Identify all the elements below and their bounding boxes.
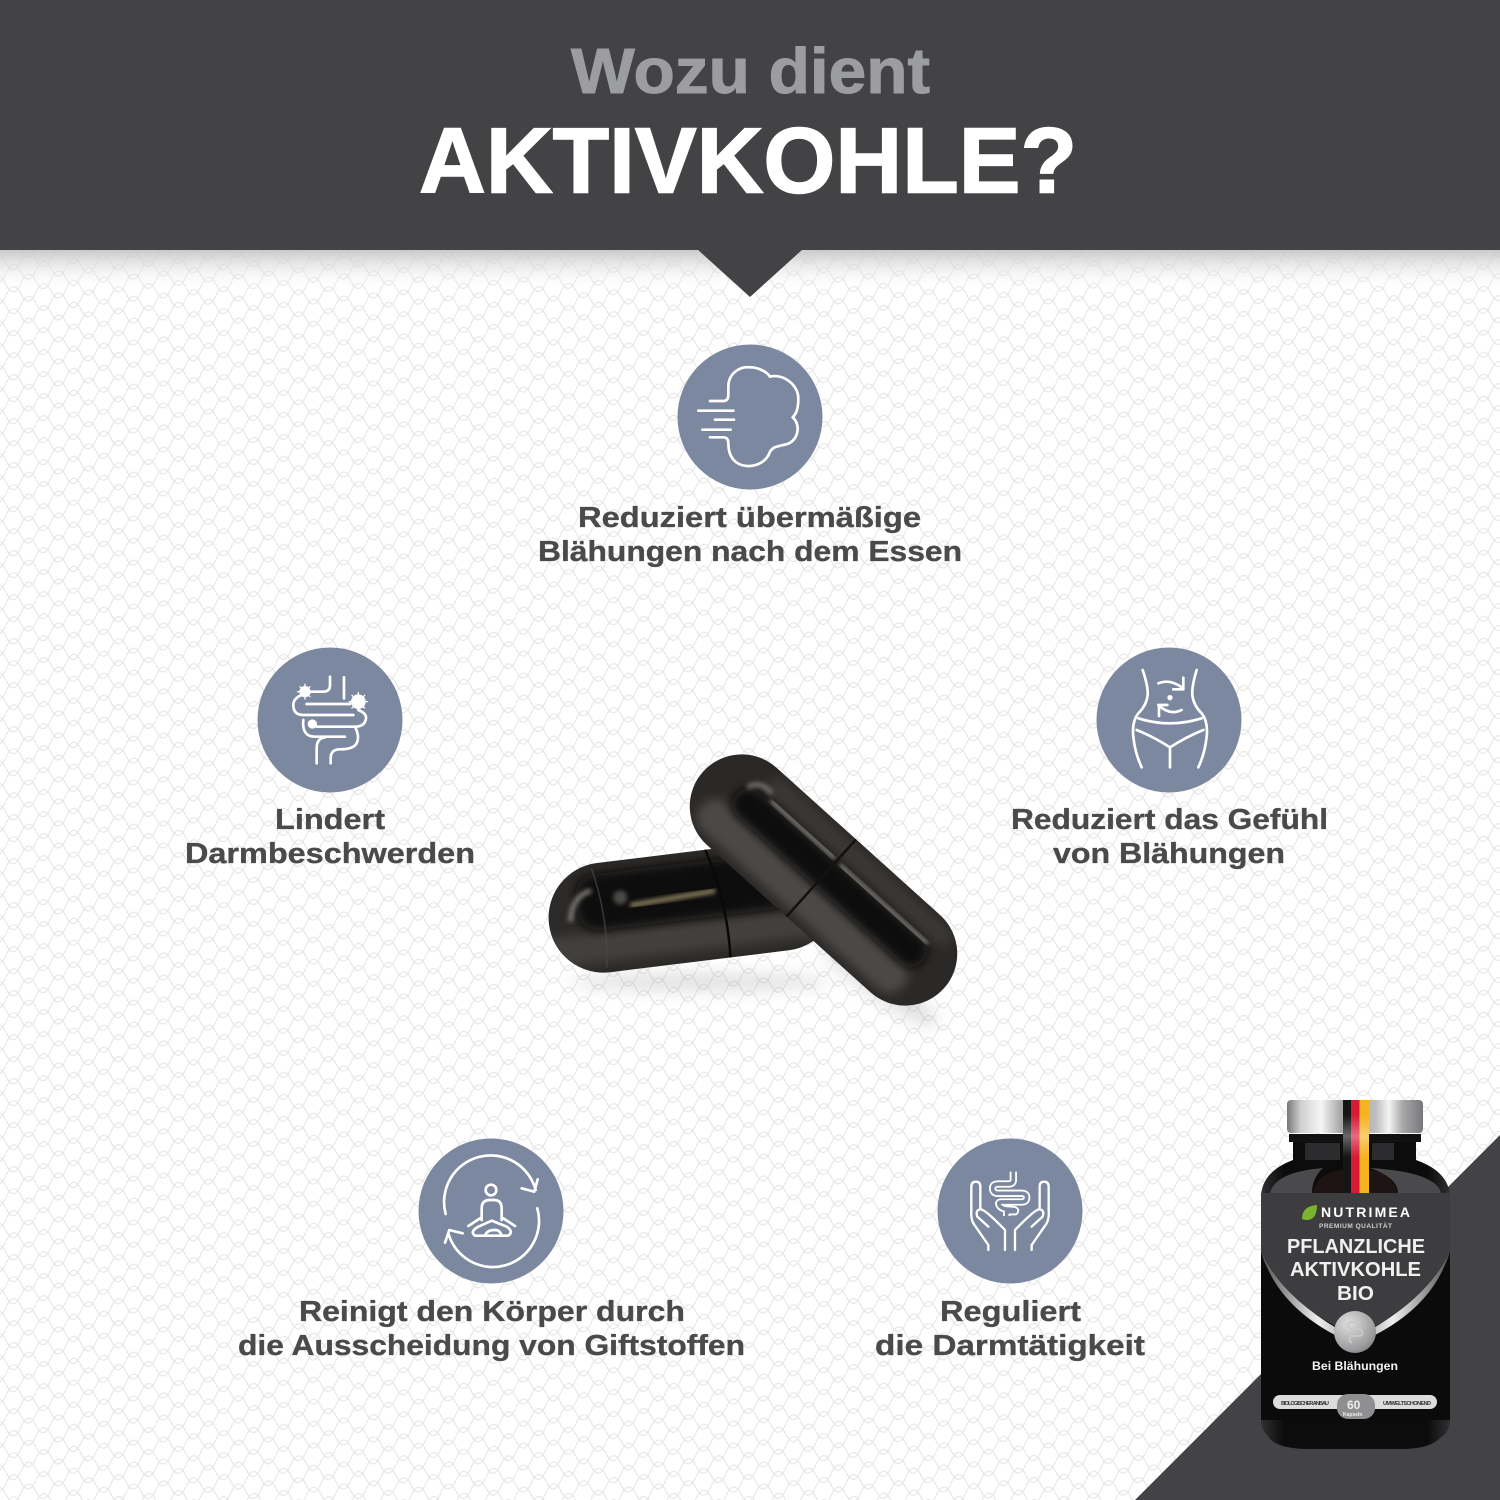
icon: meditating person in cycle [418, 1138, 564, 1284]
label: BIO [1337, 1283, 1374, 1305]
label: Blähungen nach dem Essen [538, 536, 962, 568]
label [185, 804, 475, 870]
brand logo: leaf [1302, 1205, 1317, 1220]
badge strip: UMWELTSCHONEND [1383, 1401, 1431, 1407]
label: Lindert [275, 804, 386, 836]
label: PFLANZLICHE [1287, 1236, 1425, 1258]
benefit: detox [238, 1138, 745, 1362]
label: Reduziert übermäßige [578, 502, 921, 534]
corner triangle [1135, 1135, 1500, 1500]
label: die Ausscheidung von Giftstoffen [238, 1330, 745, 1362]
heading: Wozu dient: Wozu dient [571, 35, 930, 107]
icon: hands holding intestine [938, 1138, 1082, 1284]
label: Darmbeschwerden [185, 838, 475, 870]
badge strip: 60 [1347, 1398, 1361, 1412]
capsule: back [548, 849, 814, 973]
icon: waist with rotating arrows [1096, 648, 1242, 792]
bottle body [1261, 1142, 1450, 1449]
label [238, 1296, 745, 1362]
benefit: flatulence [538, 344, 962, 568]
label: AKTIVKOHLE [1290, 1259, 1421, 1281]
label [1261, 1193, 1450, 1420]
label: Bei Blähungen [1312, 1359, 1398, 1373]
icon: intestine with irritation [258, 648, 402, 792]
label: Reinigt den Körper durch [299, 1296, 685, 1328]
badge strip [1273, 1394, 1437, 1419]
label: NUTRIMEA [1321, 1204, 1410, 1220]
benefit: bowel regulation [875, 1138, 1146, 1362]
label: Reguliert [940, 1296, 1082, 1328]
bottle cap [1287, 1100, 1423, 1133]
badge strip: Kapseln [1343, 1412, 1362, 1418]
label: Reduziert das Gefühl [1011, 804, 1328, 836]
icon: gas cloud [678, 344, 822, 490]
medal [1334, 1311, 1376, 1353]
capsule: front [690, 754, 958, 1006]
title: AKTIVKOHLE?: AKTIVKOHLE? [419, 108, 1077, 212]
label [875, 1296, 1146, 1362]
label: PREMIUM QUALITÄT [1319, 1222, 1392, 1230]
capsules [548, 754, 958, 1029]
badge strip: BIOLOGISCHER ANBAU [1281, 1401, 1329, 1407]
product bottle [1261, 1100, 1450, 1449]
label [1011, 804, 1328, 870]
label: von Blähungen [1053, 838, 1285, 870]
flag stripe [1343, 1100, 1369, 1193]
label: die Darmtätigkeit [875, 1330, 1146, 1362]
benefit: bloating feeling [1011, 648, 1328, 870]
benefit: bowel complaints [185, 648, 475, 870]
header banner [0, 0, 1500, 297]
label [538, 502, 962, 568]
